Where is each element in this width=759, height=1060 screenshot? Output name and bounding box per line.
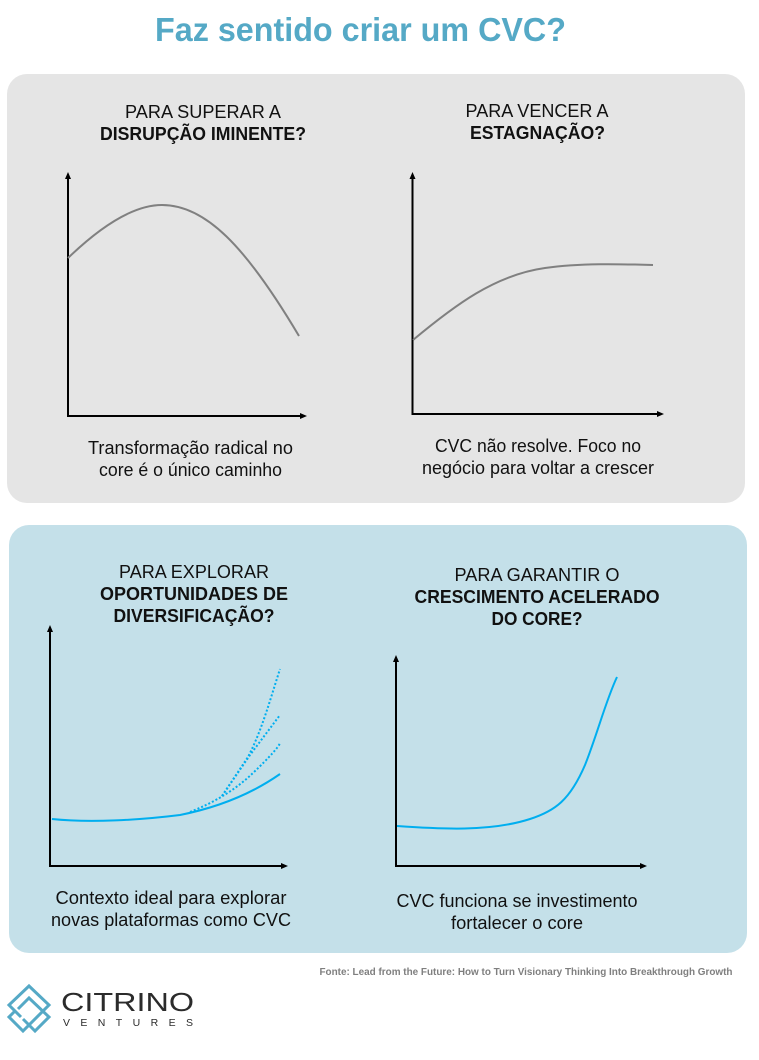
heading: diversification: OPORTUNIDADES DE	[100, 584, 288, 604]
heading: accelerated growth	[414, 565, 660, 629]
wordmark: CITRINO	[61, 987, 194, 1017]
text: accelerated growth conclusion	[396, 891, 638, 933]
text: disruption conclusion: core é o único caminho	[99, 460, 282, 480]
text: stagnation conclusion	[422, 436, 654, 478]
text: disruption conclusion: Transformação radical no	[88, 438, 293, 458]
heading: disruption: DISRUPÇÃO IMINENTE?	[100, 123, 306, 144]
title: Faz sentido criar um CVC?	[155, 11, 566, 48]
chart: stagnation curve	[410, 172, 664, 417]
heading: disruption	[100, 102, 306, 144]
heading: stagnation	[466, 101, 608, 143]
text: disruption conclusion	[88, 438, 293, 480]
heading: accelerated growth: PARA GARANTIR O	[454, 565, 620, 585]
text: accelerated growth conclusion: CVC funciona se investimento	[396, 891, 638, 911]
text: stagnation conclusion: CVC não resolve. Foco no	[435, 436, 641, 456]
chart: disruption curve	[65, 172, 307, 419]
panel: opportunities (blue)	[9, 525, 747, 953]
chart: accelerated growth curve	[393, 655, 647, 869]
text: diversification conclusion	[51, 888, 291, 930]
text: stagnation conclusion: negócio para voltar a crescer	[422, 458, 654, 478]
panel: threats (grey)	[7, 74, 745, 503]
heading: disruption: PARA SUPERAR A	[125, 102, 281, 122]
text: diversification conclusion: novas plataformas como CVC	[51, 910, 291, 930]
heading: stagnation: PARA VENCER A	[466, 101, 608, 121]
chart: diversification curves	[47, 625, 288, 869]
heading: accelerated growth: CRESCIMENTO ACELERADO	[414, 587, 660, 607]
source note: Fonte: Lead from the Future: How to Turn Visionary Thinking Into Breakthrough Growth	[320, 967, 732, 978]
heading: diversification	[100, 562, 288, 626]
logo: Citrino Ventures	[9, 986, 203, 1031]
heading: stagnation: ESTAGNAÇÃO?	[470, 122, 605, 143]
text: diversification conclusion: Contexto ideal para explorar	[56, 888, 286, 908]
tagline: VENTURES	[63, 1017, 203, 1029]
heading: diversification: DIVERSIFICAÇÃO?	[114, 605, 274, 626]
icon: interlocked diamonds	[9, 986, 49, 1031]
text: accelerated growth conclusion: fortalecer o core	[451, 913, 583, 933]
heading: diversification: PARA EXPLORAR	[119, 562, 269, 582]
heading: accelerated growth: DO CORE?	[492, 609, 582, 629]
